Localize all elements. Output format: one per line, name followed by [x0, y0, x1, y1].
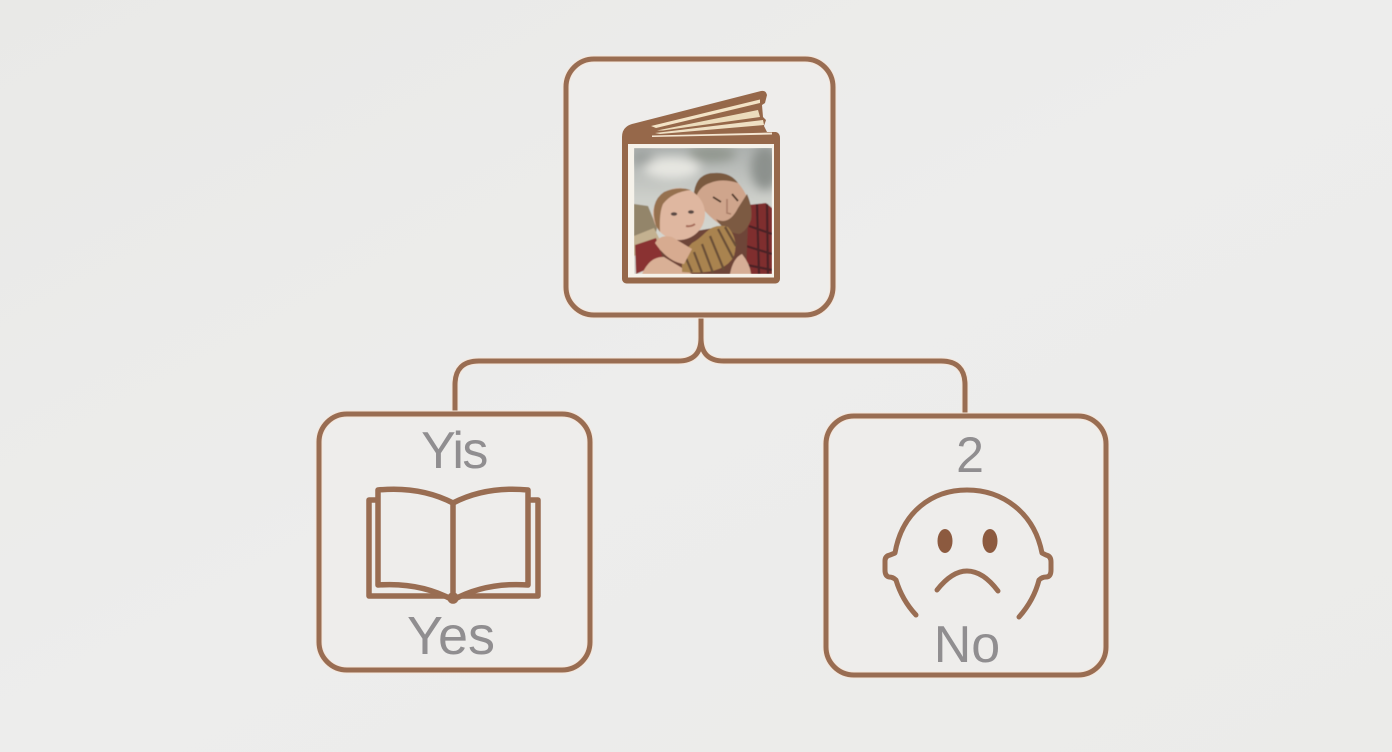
cover photograph	[630, 146, 779, 274]
label: 2: 2	[956, 427, 984, 483]
icon: open book	[369, 489, 538, 601]
eyes	[938, 529, 998, 553]
child's lower arm skin	[642, 257, 692, 274]
panel: yes branch	[319, 414, 590, 670]
man's head	[696, 180, 746, 224]
child's red jacket	[635, 238, 664, 274]
label: No: No	[934, 616, 1000, 674]
label: Yis: Yis	[421, 422, 487, 480]
label: Yes: Yes	[407, 606, 495, 666]
man's plaid shirt	[746, 202, 772, 274]
book pages and back cover	[622, 91, 780, 143]
panel: photo book	[566, 59, 833, 315]
icon: photo book with cover photograph	[622, 91, 780, 280]
panel: no branch	[826, 416, 1106, 675]
child's head	[653, 188, 705, 240]
shadow behind arms	[660, 222, 748, 274]
hills	[634, 204, 658, 236]
connector: tree branches	[455, 316, 965, 416]
icon: sad face	[885, 490, 1051, 617]
child's striped sweater arm and hand	[682, 226, 736, 273]
book cover frame	[625, 141, 777, 280]
